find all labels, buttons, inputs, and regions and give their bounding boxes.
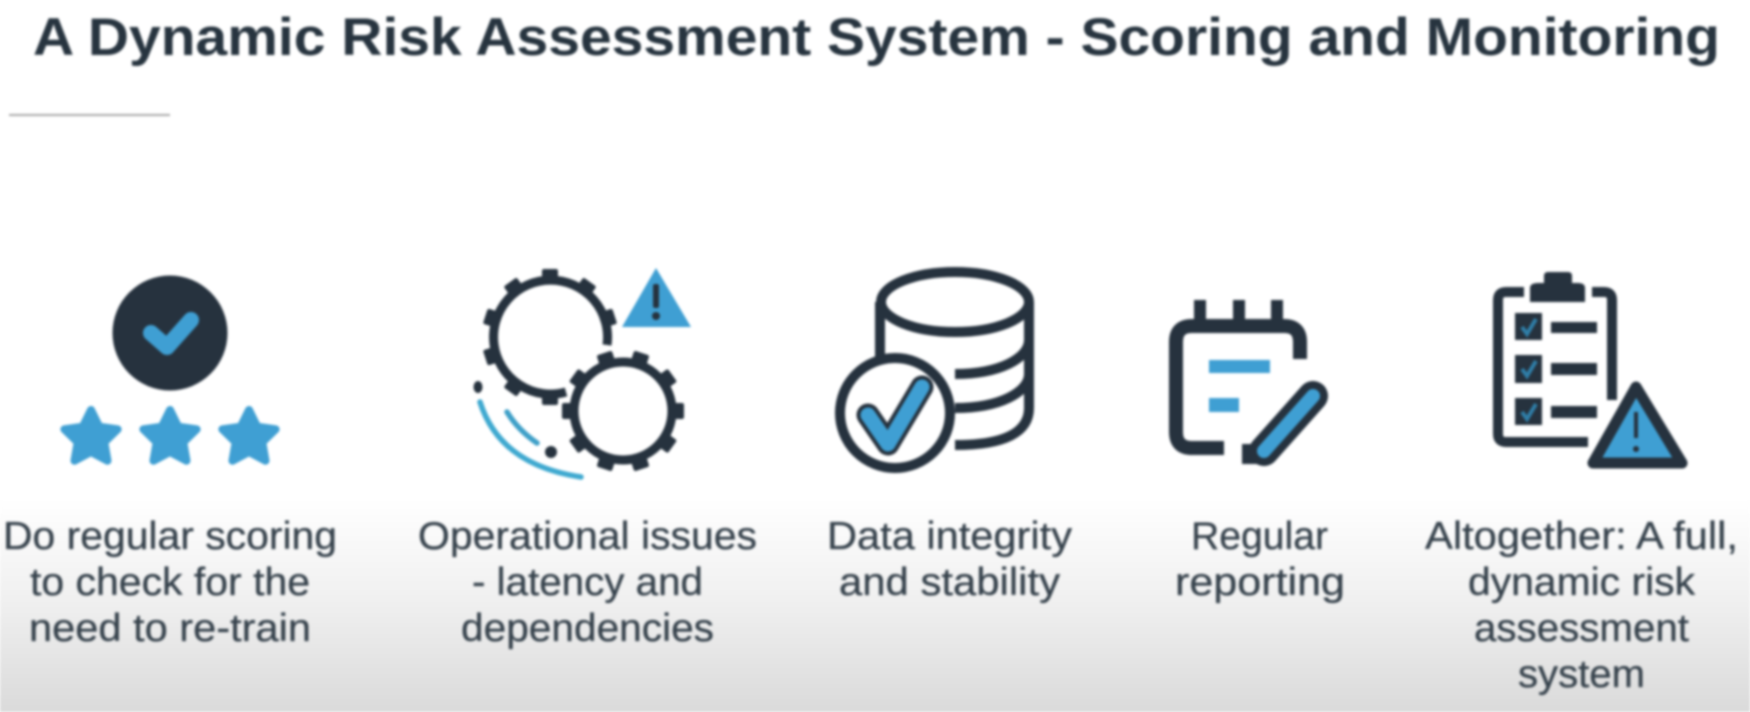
label: data integrity: and stability <box>839 561 1061 604</box>
label: regular reporting: reporting <box>1175 561 1345 604</box>
panel: full risk assessment <box>1425 272 1738 696</box>
panel: data integrity <box>827 272 1073 604</box>
icon: gears with warning <box>474 268 691 477</box>
label: full risk assessment: Altogether: A full, <box>1425 515 1738 558</box>
title: A Dynamic Risk Assessment System - Scoring and Monitoring <box>33 8 1720 67</box>
label: data integrity <box>827 515 1073 604</box>
panel: regular scoring <box>3 276 337 650</box>
label: operational issues: - latency and <box>472 561 703 604</box>
label: operational issues <box>418 515 757 650</box>
label: full risk assessment <box>1425 515 1738 696</box>
icon: clipboard with warning <box>1498 272 1682 463</box>
label: operational issues: dependencies <box>461 607 714 650</box>
label: regular scoring: Do regular scoring <box>3 515 337 558</box>
label: regular reporting <box>1175 515 1345 604</box>
label: full risk assessment: dynamic risk <box>1468 561 1696 604</box>
label: regular scoring: need to re-train <box>29 607 311 650</box>
label: regular scoring <box>3 515 337 650</box>
icon: database with check <box>840 272 1029 468</box>
label: regular scoring: to check for the <box>30 561 310 604</box>
panel: operational issues <box>418 268 757 650</box>
icon: notepad with pen <box>1176 300 1313 464</box>
label: full risk assessment: system <box>1518 653 1645 696</box>
panel: regular reporting <box>1175 300 1345 604</box>
icon: check badge and stars <box>64 276 276 461</box>
label: data integrity: Data integrity <box>827 515 1073 558</box>
label: regular reporting: Regular <box>1191 515 1328 558</box>
label: operational issues: Operational issues <box>418 515 757 558</box>
label: full risk assessment: assessment <box>1474 607 1689 650</box>
